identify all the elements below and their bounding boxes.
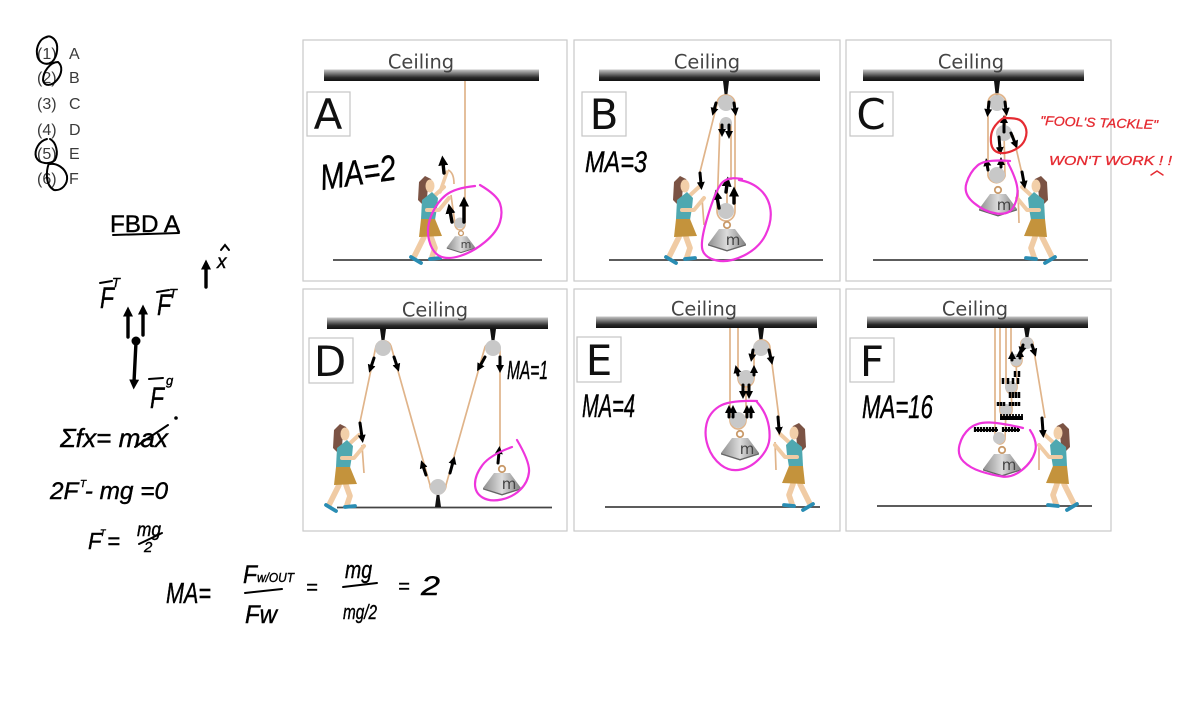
ceiling bar D: [327, 318, 548, 329]
letter box A: [307, 90, 350, 139]
weight E: m: [740, 440, 754, 458]
answer list: options 1 to 6 with letters A to F: B: [69, 70, 80, 87]
free body diagram: tension and gravity arrows: T: [112, 275, 121, 290]
free body diagram: tension and gravity arrows: F: [150, 382, 165, 415]
equation: mechanical advantage equals 2: [166, 557, 440, 629]
person D: [326, 424, 364, 511]
answer list: options 1 to 6 with letters A to F: A: [69, 46, 80, 63]
pulleys C: [989, 95, 1012, 183]
floor E: [605, 506, 820, 508]
ropes B: [700, 95, 735, 225]
letter box D: D: [314, 337, 346, 386]
person C: [1017, 176, 1055, 263]
person E: [775, 423, 813, 510]
letter box F: F: [860, 337, 884, 386]
weight F: m: [1002, 456, 1016, 474]
answer list: options 1 to 6 with letters A to F: D: [69, 122, 81, 139]
panel B: block and tackle MA 3: [574, 40, 840, 281]
red note: fool's tackle: "FOOL'S TACKLE": [1040, 113, 1160, 132]
floor B: [609, 259, 823, 261]
free body diagram: tension and gravity arrows: T: [169, 286, 178, 301]
free body diagram: tension and gravity arrows: g: [166, 373, 174, 388]
letter box E: E: [586, 336, 612, 385]
note MA=3: MA=3: [585, 146, 647, 179]
pulley A: [454, 218, 466, 228]
free body diagram: tension and gravity arrows: F: [100, 282, 115, 315]
rope A: [448, 81, 465, 230]
ceiling label F: Ceiling: [942, 298, 1008, 320]
equation: 2FT minus mg equals 0: T: [80, 479, 87, 490]
free body diagram: tension and gravity arrows: x: [216, 252, 228, 273]
upward arrows B: [717, 184, 734, 208]
equation: FT equals mg over 2: 2: [143, 539, 153, 556]
floor A: [333, 259, 542, 261]
equation: sum of forces: Σfx= max: [59, 423, 169, 453]
ceiling bar A: [324, 70, 539, 81]
magenta circle B: [702, 178, 771, 261]
heading: free body diagram A: FBD A: [110, 211, 180, 238]
weight B: [708, 222, 746, 252]
letter box B: B: [590, 90, 618, 139]
equation: mechanical advantage equals 2: 2: [420, 571, 440, 601]
letter box F: [850, 337, 894, 386]
weight C: m: [997, 196, 1011, 214]
ceiling anchor B: [723, 81, 729, 98]
floor C: [873, 259, 1088, 261]
magenta circle F: [959, 422, 1036, 477]
floor F: [877, 505, 1092, 507]
panel A: single movable pulley: [303, 40, 567, 281]
letter box B: [582, 90, 626, 139]
answer list: options 1 to 6 with letters A to F: E: [69, 146, 80, 163]
ceiling label E: Ceiling: [671, 298, 737, 320]
ceiling bar B: [599, 70, 820, 81]
answer list: options 1 to 6 with letters A to F: (6): [37, 171, 57, 188]
ropes E: [730, 328, 779, 470]
ceiling label B: Ceiling: [674, 50, 740, 74]
free body diagram: tension and gravity arrows: [100, 245, 229, 415]
ceiling bar C: [863, 70, 1084, 81]
answer list: options 1 to 6 with letters A to F: [36, 36, 81, 190]
force arrows E: [729, 350, 779, 429]
equation: mechanical advantage equals 2: mg: [345, 557, 373, 584]
weight A: m: [461, 238, 471, 251]
letter box C: C: [856, 90, 886, 139]
person B: [666, 176, 704, 263]
answer list: options 1 to 6 with letters A to F: F: [69, 171, 79, 188]
note MA=2: MA=2: [317, 147, 398, 198]
equation: mechanical advantage equals 2: Fw: [245, 601, 279, 629]
magenta circle C: [966, 161, 1018, 214]
ropes C: [988, 94, 1023, 223]
equation: mechanical advantage equals 2: w/OUT: [257, 570, 295, 585]
equation: mechanical advantage equals 2: =: [306, 577, 318, 599]
person A: [411, 172, 449, 263]
note MA=16: MA=16: [862, 389, 933, 425]
answer list: options 1 to 6 with letters A to F: (2): [37, 70, 57, 87]
answer list: options 1 to 6 with letters A to F: (5): [37, 146, 57, 163]
equation: mechanical advantage equals 2: MA=: [166, 578, 211, 610]
ceiling label D: Ceiling: [402, 298, 468, 322]
weight D: [483, 466, 521, 496]
force arrows D: [360, 357, 500, 475]
force arrows A: [443, 163, 464, 222]
force arrows F: many small tension arrows: [975, 345, 1043, 432]
equation: 2FT minus mg equals 0: 2F - mg =0: [49, 478, 169, 505]
red note: won't work: [1049, 153, 1172, 175]
answer list: options 1 to 6 with letters A to F: (3): [37, 96, 57, 113]
magenta circle E: [706, 401, 770, 470]
answer list: options 1 to 6 with letters A to F: (1): [37, 46, 57, 63]
ceiling bar F: [867, 316, 1088, 328]
rope D: [360, 341, 500, 494]
ropes F: [995, 328, 1045, 470]
weight B: m: [726, 231, 740, 249]
red note: won't work: WON'T WORK ! !: [1049, 153, 1172, 168]
equation: mechanical advantage equals 2: mg/2: [343, 602, 377, 624]
answer list: options 1 to 6 with letters A to F: (4): [37, 122, 57, 139]
ceiling label C: Ceiling: [938, 50, 1004, 74]
weight D: m: [502, 475, 516, 493]
force arrows B: [700, 103, 735, 184]
equation: mechanical advantage equals 2: =: [398, 576, 410, 598]
weight E: [721, 431, 759, 460]
pulleys E: [730, 340, 769, 428]
letter box E: [577, 336, 621, 385]
equation: FT equals mg over 2: [88, 520, 162, 556]
note MA=1: MA=1: [507, 355, 548, 385]
ceiling label A: Ceiling: [388, 50, 454, 74]
magenta circle A: [428, 185, 502, 258]
panel D: fixed pulleys MA 1: [303, 289, 567, 531]
floor D: [337, 506, 552, 508]
weight F: [983, 447, 1021, 476]
ceiling anchors D: [380, 329, 496, 507]
red circle C: [991, 117, 1026, 153]
ceiling anchor C: [994, 81, 1000, 98]
force arrows C: [987, 102, 1024, 183]
ceiling anchor F: [1024, 328, 1030, 340]
person F: [1039, 423, 1077, 510]
equation: mechanical advantage equals 2: F: [243, 561, 259, 589]
weight A: [447, 231, 475, 253]
panel E: compound pulleys MA 4: [574, 289, 840, 531]
answer list: options 1 to 6 with letters A to F: C: [69, 96, 81, 113]
letter box C: [850, 90, 893, 139]
panel F: compound pulleys MA 16: [846, 289, 1111, 531]
equation: FT equals mg over 2: T: [100, 528, 107, 538]
pulleys F: [993, 337, 1033, 444]
free body diagram: tension and gravity arrows: F: [157, 289, 172, 322]
weight C: [979, 187, 1017, 216]
note MA=4: MA=4: [582, 388, 635, 424]
pulleys B: [718, 95, 734, 219]
ceiling anchor E: [758, 328, 764, 344]
letter box A: A: [314, 90, 343, 139]
equation: FT equals mg over 2: mg: [137, 520, 161, 541]
equation: FT equals mg over 2: F =: [88, 528, 120, 554]
panel C: fool's tackle: [846, 40, 1111, 281]
pulleys D: [375, 340, 501, 495]
ceiling bar E: [596, 316, 817, 328]
magenta circle D: [475, 440, 529, 500]
